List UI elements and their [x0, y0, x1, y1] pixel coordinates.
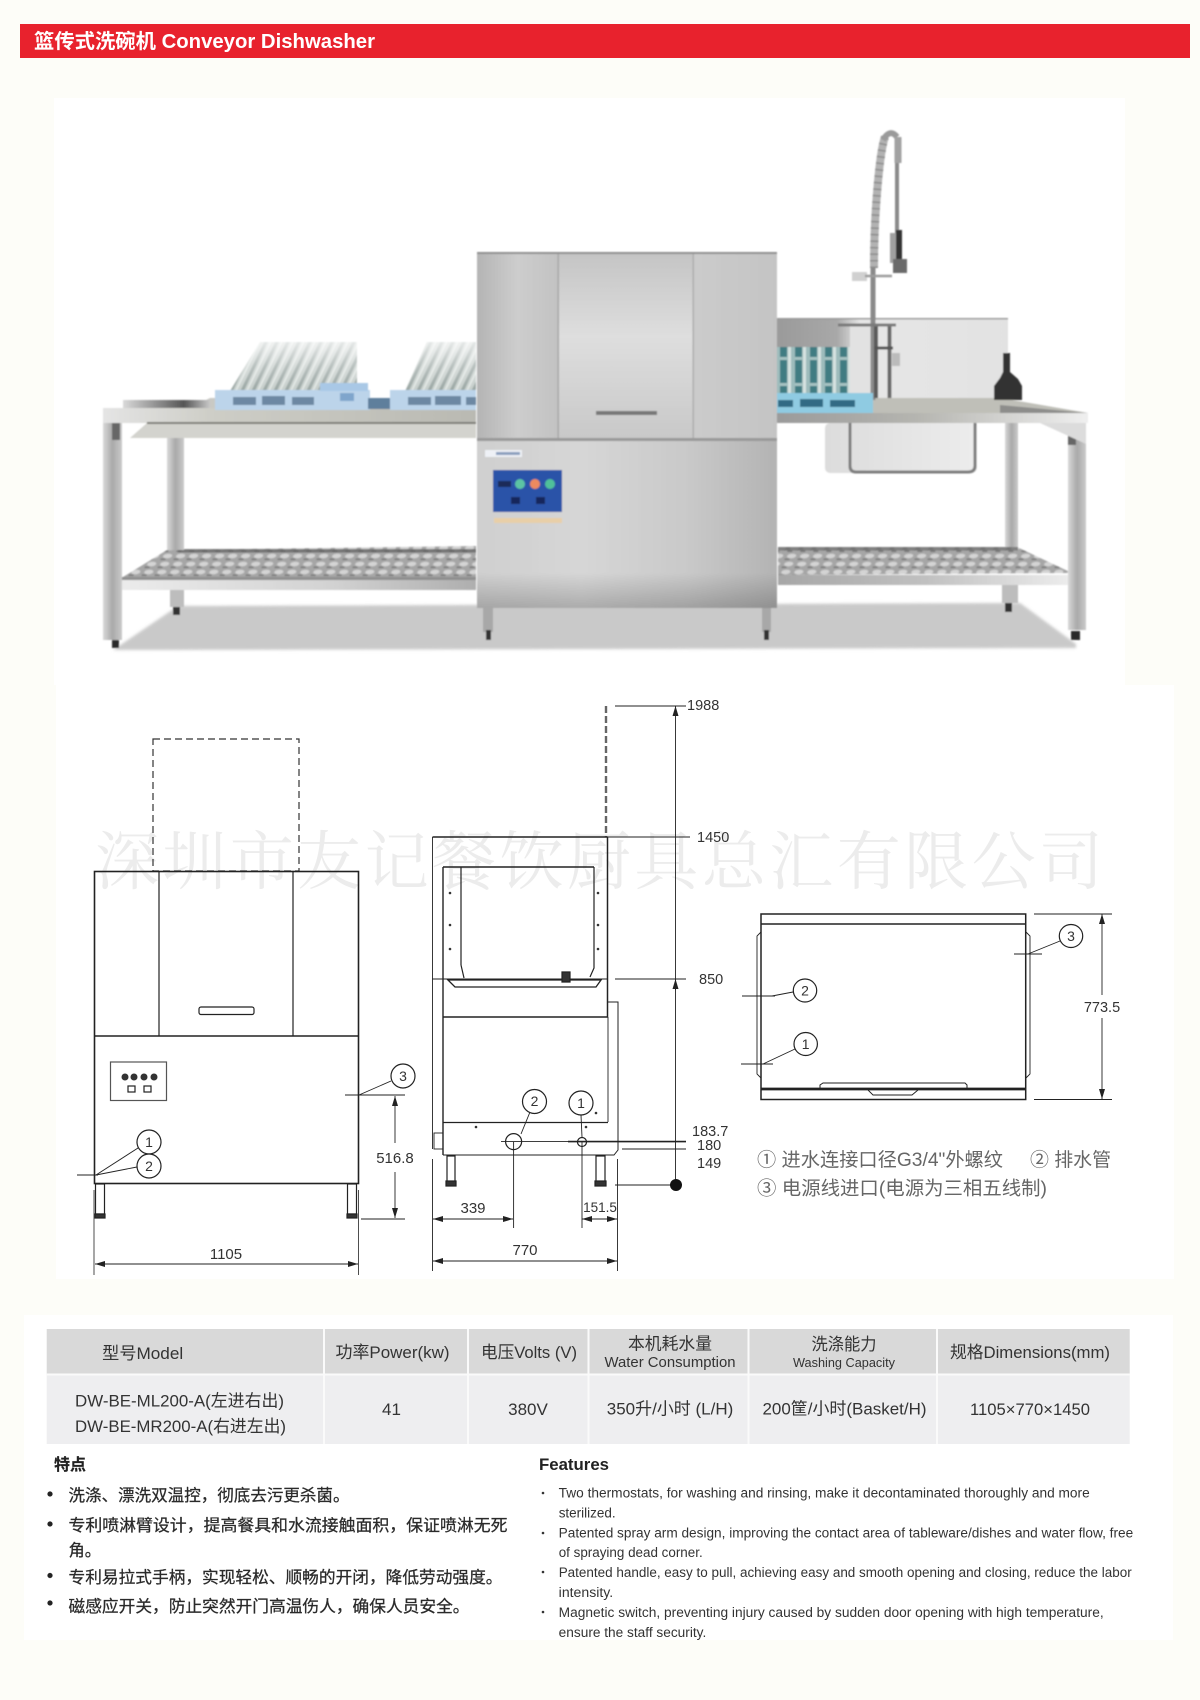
- drawing: side view: 151.5: [583, 1200, 617, 1215]
- specification table: 洗涤能力: [812, 1335, 876, 1354]
- drawing: front view: 1105: [210, 1246, 242, 1263]
- drawing: top view: 773.5: [1084, 1000, 1120, 1016]
- connection legend: ③ 电源线进口(电源为三相五线制): [757, 1178, 1047, 1200]
- right rack with glasses: [777, 347, 873, 413]
- specification table: 型号Model: [102, 1344, 183, 1363]
- features: English: Patented spray arm design, improving the contact area of tableware/dishes and water flow, free: [559, 1526, 1133, 1540]
- specification table: 350升/小时 (L/H): [607, 1400, 733, 1418]
- right table and sink: [777, 318, 1088, 640]
- drawing: top view: 1: [802, 1036, 810, 1052]
- specification table: [46, 1329, 1130, 1444]
- panel: product photo: [54, 98, 1125, 685]
- drawing: top view: [741, 914, 1120, 1100]
- floor shadow: [113, 603, 1076, 650]
- features: Chinese: 洗涤、漂洗双温控，彻底去污更杀菌。: [68, 1487, 350, 1505]
- features: Chinese: 角。: [68, 1542, 101, 1560]
- height dimension labels: 850: [699, 972, 723, 988]
- drawing: top view: 2: [801, 982, 809, 998]
- panel: technical drawings: [56, 685, 1174, 1279]
- specification table: 规格Dimensions(mm): [950, 1343, 1110, 1362]
- faucet with spray hose: [838, 133, 907, 400]
- specification table: Washing Capacity: [793, 1355, 895, 1370]
- features: Chinese: [48, 1455, 508, 1616]
- specification table: 功率Power(kw): [336, 1343, 450, 1362]
- drawing: front view: 3: [399, 1068, 407, 1084]
- drawing: front view: [77, 739, 415, 1275]
- drawing: front view: 1: [145, 1134, 153, 1150]
- drawing: side view: 339: [460, 1200, 486, 1217]
- drawing: side view: 2: [531, 1093, 539, 1109]
- features: English: Patented handle, easy to pull, achieving easy and smooth opening and closing, reduce the labor: [559, 1565, 1132, 1580]
- specification table: DW-BE-ML200-A(左进右出): [75, 1392, 284, 1410]
- drawing: side view: [432, 706, 690, 1271]
- drawing: front view: 2: [145, 1158, 153, 1174]
- panel: specifications and features: [24, 1315, 1173, 1640]
- height dimension labels: 1988: [687, 698, 719, 714]
- height dimension labels: 180: [697, 1138, 721, 1154]
- left table: [103, 398, 476, 648]
- height dimension labels: 1450: [697, 830, 729, 846]
- specification table: 本机耗水量: [628, 1334, 712, 1354]
- features: English: ensure the staff security.: [559, 1625, 706, 1640]
- features: English: Features: [539, 1456, 609, 1474]
- title banner: 篮传式洗碗机 Conveyor Dishwasher: [34, 29, 375, 53]
- height dimension labels: 183.7: [692, 1124, 728, 1140]
- specification table: DW-BE-MR200-A(右进左出): [75, 1417, 286, 1436]
- specification table: 41: [382, 1400, 401, 1419]
- features: Chinese: 专利易拉式手柄，实现轻松、顺畅的开闭，降低劳动强度。: [68, 1569, 502, 1587]
- features: English: of spraying dead corner.: [559, 1545, 703, 1560]
- features: English: sterilized.: [559, 1506, 616, 1520]
- left racks with plates: [215, 342, 476, 410]
- features: English: [539, 1456, 1133, 1640]
- specification table: 200筐/小时(Basket/H): [762, 1400, 926, 1418]
- drawing: side view: 1: [577, 1095, 585, 1111]
- features: English: intensity.: [559, 1585, 613, 1600]
- specification table: 380V: [508, 1400, 549, 1419]
- height dimension labels: 149: [697, 1156, 721, 1172]
- connection legend: [757, 1149, 1111, 1200]
- specification table: 1105×770×1450: [970, 1400, 1090, 1419]
- features: Chinese: 特点: [54, 1455, 86, 1474]
- features: Chinese: 磁感应开关，防止突然开门高温伤人，确保人员安全。: [68, 1597, 469, 1616]
- specification table: Water Consumption: [604, 1354, 736, 1371]
- features: English: Magnetic switch, preventing injury caused by sudden door opening with high temperature,: [559, 1605, 1104, 1620]
- height dimension labels: [687, 698, 729, 1172]
- features: Chinese: 专利喷淋臂设计，提高餐具和水流接触面积，保证喷淋无死: [68, 1517, 508, 1535]
- specification table: 电压Volts (V): [481, 1343, 577, 1362]
- watermark: 深圳市友记餐饮厨具总汇有限公司: [95, 811, 1103, 903]
- features: English: Two thermostats, for washing and rinsing, make it decontaminated thoroughly and more: [559, 1486, 1090, 1500]
- connection legend: ① 进水连接口径G3/4"外螺纹: [757, 1149, 1003, 1171]
- drawing: side view: 770: [512, 1242, 538, 1259]
- dishwasher body: [477, 252, 777, 640]
- connection legend: ② 排水管: [1030, 1149, 1111, 1171]
- black bottle: [994, 353, 1022, 400]
- title banner: [20, 24, 1190, 58]
- drawing: top view: 3: [1067, 928, 1075, 944]
- drawing: front view: 516.8: [376, 1150, 414, 1167]
- control panel: [493, 470, 562, 523]
